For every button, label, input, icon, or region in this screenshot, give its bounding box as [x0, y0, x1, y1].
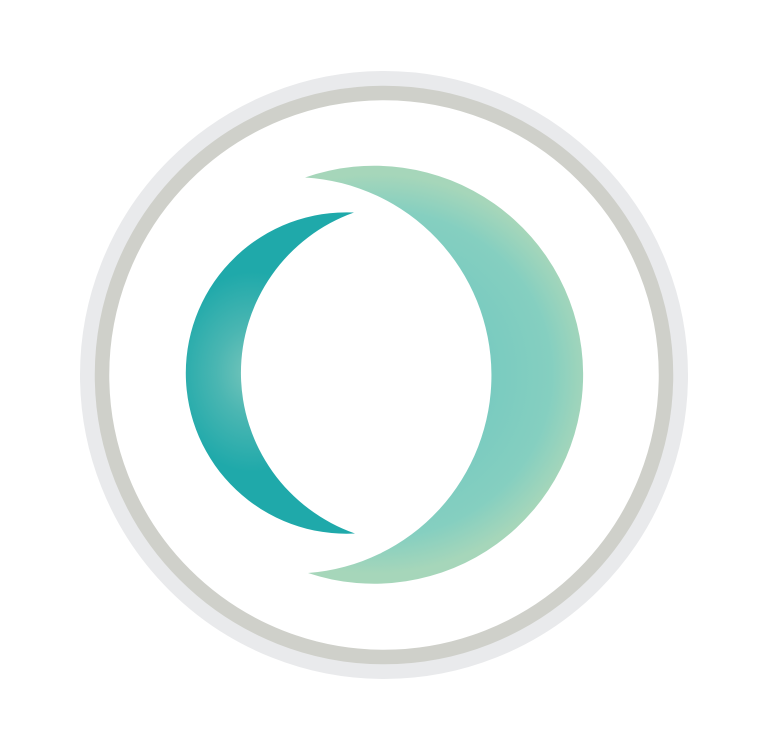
right crescent — [305, 166, 583, 584]
outer ring — [88, 78, 680, 672]
left crescent — [186, 212, 355, 534]
inner ring — [102, 93, 666, 657]
